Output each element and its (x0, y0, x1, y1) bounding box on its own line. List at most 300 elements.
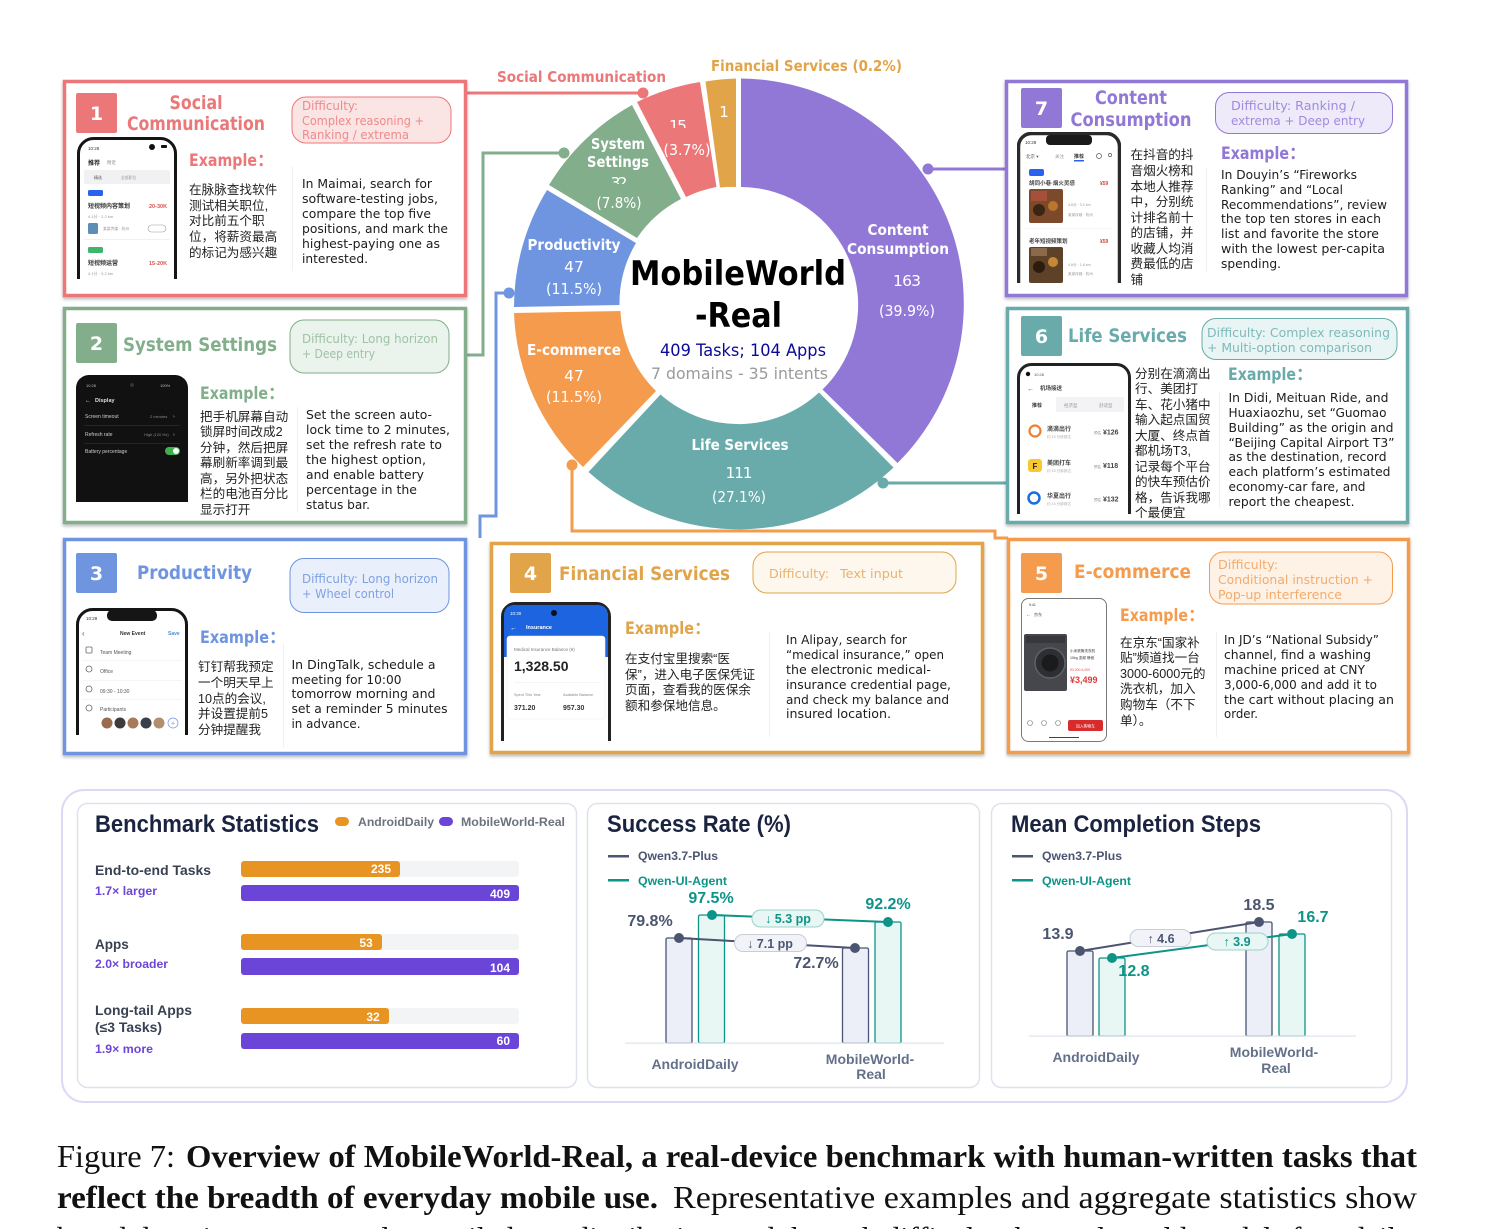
phone screenshot (77, 137, 177, 279)
phone screenshot: 短视频运营 (88, 259, 118, 267)
heading: Financial Services (559, 563, 730, 585)
badge 5: 5 (1035, 563, 1048, 585)
phone screenshot: 老年短视频策划 (1029, 237, 1068, 245)
english task: and enable battery (306, 467, 425, 482)
phone screenshot: 10:28 (88, 146, 100, 151)
phone screenshot: ¥126 (1103, 430, 1119, 436)
delta pills: ↓ 5.3 pp (765, 912, 811, 926)
phone screenshot: 短视频内容策划 (88, 202, 130, 210)
chinese task: 在抖音的抖 (1130, 147, 1194, 162)
segment labels: 47 (564, 258, 584, 276)
chinese task: 显示打开 (200, 503, 250, 517)
phone screenshot: ← (1027, 386, 1034, 393)
figure caption (57, 1138, 1417, 1229)
heading: Productivity (137, 562, 253, 584)
segment labels: E-commerce (527, 341, 621, 359)
phone screenshot: 美团打车 (1047, 459, 1071, 467)
phone screenshot: Display (95, 398, 116, 404)
english task: status bar. (306, 497, 370, 512)
english task: In Alipay, search for (786, 632, 908, 647)
segment labels: Consumption (847, 240, 949, 258)
english task: Recommendations”, review (1221, 197, 1387, 212)
english task: and check my balance and (786, 692, 949, 707)
phone screenshot: 胡同小巷·烟火灵感 (1029, 179, 1075, 187)
example label: Example (200, 384, 268, 403)
english task: In Douyin’s “Fireworks (1221, 167, 1357, 182)
chinese task: 本地人推荐 (1130, 180, 1193, 194)
heading: Benchmark Statistics (95, 811, 319, 838)
chinese task: 钉钉帮我预定 (198, 660, 274, 674)
axis labels: Real (1261, 1060, 1291, 1076)
segment labels (527, 103, 949, 506)
chinese task: 在京东“国家补 (1120, 635, 1200, 650)
values: 97.5% (688, 890, 734, 907)
phone screenshot (76, 608, 188, 735)
connector: e-commerce (566, 460, 1008, 538)
heading: Life Services (1068, 325, 1187, 347)
english task: meeting for 10:00 (292, 672, 402, 687)
phone screenshot: ← (510, 625, 517, 632)
row: long-tail apps (95, 1003, 519, 1056)
phone screenshot: 预估 (1094, 464, 1101, 469)
bars (625, 915, 944, 1044)
difficulty pill: Pop-up interference (1218, 587, 1342, 602)
difficulty pill (292, 97, 451, 143)
legend (335, 815, 565, 829)
axis labels: MobileWorld- (1230, 1044, 1319, 1060)
phone screenshot: 20-30K (149, 204, 167, 210)
phone screenshot: 15-20K (149, 261, 167, 267)
english task: insured location. (786, 706, 891, 721)
phone screenshot: 全部职位 (121, 175, 136, 180)
phone screenshot: Medical Insurance Balance (¥) (514, 647, 575, 652)
values: 72.7% (793, 955, 839, 972)
english task: set the refresh rate to (306, 437, 442, 452)
heading: E-commerce (1074, 561, 1191, 583)
figure caption: Overview of MobileWorld-Real, a real-device benchmark with human-written tasks that (186, 1138, 1417, 1174)
example label: ： (269, 623, 286, 648)
delta pills: ↓ 7.1 pp (747, 937, 793, 951)
example label: ： (268, 379, 285, 404)
phone screenshot: 10:28 (1034, 372, 1045, 377)
difficulty pill: Complex reasoning + (302, 113, 424, 128)
axis labels (651, 1051, 915, 1082)
chinese task: 个最便宜 (1135, 506, 1185, 520)
badge 2: 2 (90, 333, 103, 355)
english task: the electronic medical- (786, 662, 931, 677)
phone screenshot (1017, 132, 1121, 283)
chinese task: 大厦、终点首 (1135, 428, 1211, 443)
english task: In Didi, Meituan Ride, and (1228, 390, 1388, 405)
chinese task: 保”，进入电子医保凭证 (625, 668, 756, 682)
segment labels: 1 (719, 103, 729, 121)
phone screenshot: 10:28 (1025, 140, 1037, 145)
english task: the cart without placing an (1224, 692, 1394, 707)
chinese task: 的店铺，并 (1130, 225, 1193, 240)
chinese task: 并设置提前5 (198, 706, 268, 721)
segment: social communication (637, 82, 716, 197)
row: apps: 2.0× broader (95, 957, 168, 971)
english task: the highest option, (306, 452, 426, 467)
badge 3 (76, 553, 117, 593)
difficulty pill: + Multi-option comparison (1207, 340, 1372, 355)
english task: Huaxiaozhu, set “Guomao (1228, 405, 1386, 420)
panel 6: life services (1008, 308, 1408, 554)
chinese task: 的标记为感兴趣 (189, 245, 278, 260)
values: 18.5 (1243, 897, 1275, 914)
phone screenshot: 推荐 (1032, 402, 1042, 409)
axis labels (1052, 1044, 1319, 1076)
english task: the top ten stores in each (1221, 211, 1381, 226)
legend (608, 849, 727, 888)
panel 5: e-commerce (1008, 540, 1408, 752)
donut chart (514, 78, 964, 529)
chinese task: 栏的电池百分比 (200, 486, 288, 501)
segment: productivity (514, 190, 636, 307)
phone screenshot: ¥3,499 (1070, 675, 1098, 685)
example label: Example (625, 619, 694, 638)
delta pills: ↑ 4.6 (1147, 932, 1175, 946)
donut centre title: -Real (695, 296, 782, 336)
segment: life services (588, 392, 894, 529)
donut centre title: 7 domains - 35 intents (651, 364, 828, 383)
chinese task (198, 660, 274, 737)
difficulty pill: + Wheel control (302, 586, 394, 601)
connector: life services (878, 478, 1006, 488)
phone screenshot: 10:28 (86, 616, 98, 621)
english task: insurance credential page, (786, 677, 951, 692)
badge 7: 7 (1035, 98, 1048, 120)
row: long-tail apps: (≤3 Tasks) (95, 1020, 162, 1035)
values (1042, 897, 1329, 980)
english task: In JD’s “National Subsidy” (1224, 632, 1379, 647)
phone screenshot (1022, 598, 1106, 742)
card: mean completion steps (992, 804, 1392, 1088)
difficulty pill: Difficulty: (1218, 557, 1278, 572)
phone screenshot: New Event (120, 631, 146, 637)
values: 13.9 (1042, 926, 1074, 943)
chinese task: 铺 (1130, 273, 1143, 287)
panel 1: social communication (64, 82, 466, 308)
chinese task: 位，将薪资最高 (189, 229, 277, 244)
phone screenshot: F (1033, 462, 1038, 471)
english task: positions, and mark the (302, 221, 448, 236)
english task: machine priced at CNY (1224, 662, 1365, 677)
badge 4: 4 (524, 563, 537, 585)
chinese task (625, 652, 756, 713)
english task: 3,000-6,000 and add it to (1224, 677, 1377, 692)
difficulty pill (290, 320, 449, 373)
example label: Example (200, 628, 269, 647)
chinese task: 分钟，然后把屏 (200, 440, 288, 455)
chinese task: 在脉脉查找软件 (189, 183, 277, 197)
chinese task: 高，另外把状态 (200, 471, 289, 486)
example label: ： (257, 146, 274, 171)
chinese task: 3000-6000元的 (1120, 666, 1205, 681)
phone screenshot: 100% (160, 383, 171, 388)
segment labels: 47 (564, 367, 584, 385)
phone screenshot: 预估 (1094, 497, 1101, 502)
english task: “Beijing Capital Airport T3” (1228, 435, 1394, 450)
english task: tomorrow morning and (292, 686, 436, 701)
segment labels: (7.8%) (596, 194, 642, 212)
axis labels: AndroidDaily (651, 1056, 739, 1072)
badge 6: 6 (1035, 326, 1048, 348)
phone screenshot: Refresh rate (85, 432, 113, 438)
chinese task: 格，告诉我哪 (1135, 490, 1211, 505)
phone screenshot: 附近 (107, 159, 116, 166)
phone screenshot: 1,328.50 (514, 658, 569, 674)
axis labels: Real (856, 1066, 886, 1082)
difficulty pill (1202, 318, 1397, 360)
segment labels: 163 (893, 272, 921, 290)
phone screenshot: 10kg 变频 静音 (1070, 655, 1095, 660)
difficulty pill: extrema + Deep entry (1231, 113, 1366, 128)
example label: ： (1296, 360, 1313, 385)
segment labels: 32 (610, 174, 628, 192)
phone screenshot: 约 15 分钟到达 (1047, 434, 1071, 439)
english task: software-testing jobs, (302, 191, 438, 206)
example label: ： (694, 614, 711, 639)
phone screenshot: 某某传媒 · 杭州 (103, 226, 129, 231)
difficulty pill (1216, 92, 1392, 134)
english task: Set the screen auto- (306, 407, 432, 422)
segment labels: (11.5%) (546, 280, 602, 298)
chinese task: 记录每个平台 (1135, 459, 1211, 474)
phone screenshot (501, 602, 611, 741)
segment: financial services (706, 78, 736, 188)
chinese task: 计排名前十 (1130, 210, 1193, 225)
phone screenshot: 某某传媒 · 杭州 (1068, 212, 1093, 217)
donut centre title (630, 254, 846, 383)
chinese task: 单）。 (1120, 714, 1151, 728)
example label: ： (1188, 601, 1205, 626)
phone screenshot: 预估 (1094, 430, 1101, 435)
chinese task: 购物车（不下 (1120, 697, 1196, 712)
row: apps (95, 934, 519, 975)
english task: “medical insurance,” open (786, 647, 944, 662)
phone screenshot: Team Meeting (100, 650, 132, 656)
phone screenshot: › (173, 432, 175, 438)
segment labels: 111 (726, 464, 752, 482)
example label: Example (1120, 606, 1188, 625)
segment: e-commerce (514, 311, 656, 467)
phone screenshot: ¥59 (1100, 239, 1109, 245)
phone screenshot: 957.30 (563, 705, 585, 712)
english task: set a reminder 5 minutes (292, 701, 448, 716)
english task: percentage in the (306, 482, 417, 497)
phone screenshot: Spent This Year (514, 693, 541, 697)
phone screenshot: 10:30 (510, 611, 522, 616)
phone screenshot: 华夏出行 (1047, 492, 1071, 500)
delta pills: ↑ 3.9 (1223, 935, 1251, 949)
heading: Social (170, 92, 222, 114)
phone screenshot: 小米滚筒洗衣机 (1070, 648, 1096, 653)
chinese task: 测试相关职位, (189, 199, 268, 213)
row: long-tail apps: Long-tail Apps (95, 1003, 192, 1018)
english task: spending. (1221, 256, 1281, 271)
panel 4: financial services (492, 544, 982, 784)
phone screenshot: 滴滴出行 (1047, 425, 1071, 433)
badge 1 (76, 93, 117, 133)
phone screenshot: 北京 ▾ (1026, 153, 1039, 160)
connector: system settings (467, 148, 570, 355)
delta pills (734, 910, 824, 952)
chinese task: 洗衣机，加入 (1120, 681, 1196, 696)
segment labels: 15 (669, 117, 687, 135)
chinese task: 分钟提醒我 (198, 722, 261, 737)
chinese task: 音烟火榜和 (1130, 163, 1193, 178)
values: 79.8% (627, 913, 673, 930)
english task (306, 407, 450, 512)
english task: interested. (302, 251, 368, 266)
phone screenshot: Save (168, 631, 180, 637)
example label: ： (1289, 139, 1306, 164)
difficulty pill: Difficulty: Complex reasoning (1207, 325, 1390, 340)
values: 12.8 (1118, 963, 1150, 980)
heading: Content (1095, 87, 1167, 109)
chinese task: 幕刷新率调到最 (200, 455, 289, 470)
phone screenshot: 经济型 (1064, 402, 1078, 409)
example label: Example (1228, 365, 1296, 384)
panel 7: content consumption (1006, 82, 1406, 324)
phone screenshot: Insurance (526, 625, 552, 631)
chinese task (1130, 147, 1194, 287)
heading: System Settings (123, 334, 277, 356)
heading: Mean Completion Steps (1011, 811, 1261, 838)
phone screenshot: + (171, 720, 175, 728)
difficulty pill: Difficulty: Ranking / (1231, 98, 1356, 113)
chinese task: 收藏人均消 (1130, 242, 1193, 256)
english task: with the lowest per-capita (1221, 241, 1385, 256)
english task: Building” as the origin and (1228, 420, 1394, 435)
phone screenshot: ← (85, 398, 91, 404)
badge 1: 1 (90, 103, 103, 125)
bars (1029, 922, 1356, 1037)
chinese task: 对比前五个职 (189, 213, 265, 228)
chinese task: 页面，查看我的医保余 (625, 682, 751, 697)
phone screenshot: › (173, 414, 175, 420)
donut centre title: MobileWorld (630, 254, 846, 294)
phone screenshot: 约 15 分钟到达 (1047, 468, 1071, 473)
legend: MobileWorld-Real (461, 815, 565, 829)
english task (1228, 390, 1394, 509)
example label: Example (1221, 144, 1289, 163)
example label (625, 614, 711, 639)
segment labels: Content (868, 221, 928, 239)
phone screenshot: 371.20 (514, 705, 536, 712)
chinese task: 10点的会议, (198, 691, 266, 706)
heading (1070, 87, 1192, 131)
axis labels: AndroidDaily (1052, 1049, 1140, 1065)
phone screenshot: 关注 (1055, 153, 1064, 160)
segment labels: (27.1%) (712, 488, 766, 506)
difficulty pill: Difficulty: (302, 98, 358, 113)
phone screenshot: High (120 Hz) (144, 432, 169, 437)
chinese task: 贴”频道找一台 (1120, 651, 1200, 665)
phone screenshot: 9:41 (1029, 603, 1036, 607)
trend lines (1075, 917, 1297, 963)
row: end-to-end tasks: 1.7× larger (95, 884, 157, 898)
badge 7 (1021, 88, 1062, 128)
figure caption: Figure 7: (57, 1138, 175, 1174)
heading: Success Rate (%) (607, 811, 791, 838)
phone screenshot: 09:30 - 10:30 (100, 689, 130, 695)
figure caption: Representative examples and aggregate statistics show (673, 1179, 1417, 1215)
row: apps: 53 (359, 936, 373, 950)
values: 16.7 (1297, 909, 1329, 926)
english task: highest-paying one as (302, 236, 440, 251)
english task: order. (1224, 706, 1258, 721)
statistics container (62, 790, 1407, 1102)
label: financial services callout: Financial Services (0.2%) (711, 57, 902, 75)
chinese task: 都机场T3, (1135, 444, 1191, 458)
row: end-to-end tasks (95, 861, 519, 901)
donut centre title: 409 Tasks; 104 Apps (660, 341, 826, 360)
legend: Qwen3.7-Plus (638, 849, 718, 863)
phone screenshot: ¥132 (1103, 496, 1119, 504)
difficulty pill: Ranking / extrema (302, 127, 409, 142)
phone screenshot: 加入购物车 (1076, 724, 1095, 728)
row: end-to-end tasks: 409 (490, 887, 510, 901)
english task: report the cheapest. (1228, 494, 1354, 509)
row: end-to-end tasks: End-to-end Tasks (95, 863, 211, 878)
phone screenshot: 4.6分 · 3.2 km (1068, 202, 1091, 207)
chinese task: 费最低的店 (1130, 256, 1193, 271)
difficulty pill: Difficulty: Long horizon (302, 571, 438, 586)
phone screenshot: Available Balance (563, 693, 593, 697)
difficulty pill: Difficulty: (769, 566, 829, 581)
english task (786, 632, 951, 721)
phone screenshot: Participants (100, 707, 127, 713)
phone screenshot: Screen timeout (85, 414, 119, 420)
english task: economy-car fare, and (1228, 479, 1366, 494)
segment: content consumption (741, 78, 964, 463)
phone screenshot: 10:28 (86, 383, 97, 388)
heading (127, 92, 265, 135)
chinese task: 把手机屏幕自动 (200, 410, 288, 424)
segment: system settings (549, 105, 681, 238)
chinese task: 在支付宝里搜索“医 (625, 652, 730, 666)
chinese task: 额和参保地信息。 (625, 698, 726, 713)
badge 4 (510, 553, 551, 593)
phone screenshot: 4.1分 · 3.2 km (88, 270, 114, 276)
chinese task: 锁屏时间改成2 (200, 424, 283, 439)
badge 5 (1021, 553, 1062, 593)
card: success rate (588, 804, 980, 1088)
english task (292, 657, 448, 731)
phone screenshot: 4.1分 · 2.2 km (88, 213, 114, 219)
english task: lock time to 2 minutes, (306, 422, 450, 437)
phone screenshot: ¥3,000-6,000 (1070, 668, 1090, 672)
segment labels: Productivity (528, 236, 621, 254)
english task: Ranking” and “Local (1221, 182, 1343, 197)
panel 3: productivity (64, 540, 466, 780)
english task (1221, 167, 1387, 271)
phone screenshot: ← (1026, 612, 1031, 618)
difficulty pill (290, 558, 449, 612)
example label (200, 623, 286, 648)
chinese task: 分别在滴滴出 (1135, 366, 1211, 381)
english task: each platform’s estimated (1228, 464, 1390, 479)
values: 92.2% (865, 896, 911, 913)
card: benchmark statistics (78, 804, 576, 1088)
phone screenshot: 机场接送 (1040, 384, 1063, 392)
phone screenshot: 精选 (94, 174, 102, 180)
phone screenshot (76, 375, 188, 502)
chinese task: 的快车预估价 (1135, 474, 1211, 489)
badge 2 (76, 323, 117, 363)
